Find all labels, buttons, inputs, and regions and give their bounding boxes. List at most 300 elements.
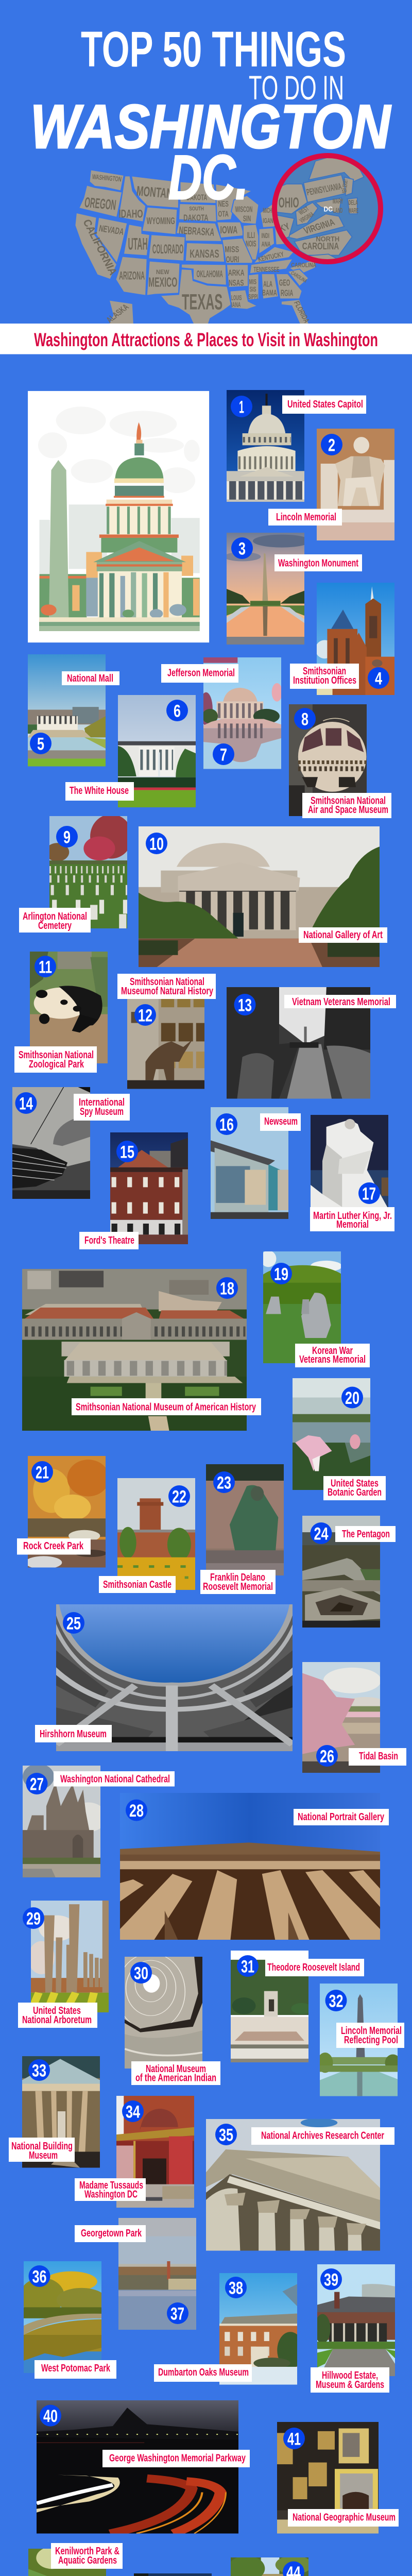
label: Washington Monument: Washington Monument [278, 557, 358, 569]
label: United States Botanic Garden [323, 1476, 386, 1500]
label: Hirshhorn Museum: Hirshhorn Museum [40, 1728, 107, 1740]
photo: United States Capitol [227, 390, 304, 502]
number badge 5: 5 [37, 735, 44, 754]
map of the United States: TEXAS [182, 290, 222, 314]
label: The Pentagon: The Pentagon [342, 1529, 390, 1540]
label: Hillwood Estate, Museum & Gardens: Museum & Gardens [316, 2379, 384, 2391]
label: National Archives Research Center [251, 2127, 394, 2145]
map inset: DC region [268, 152, 386, 267]
number badge 36: 36 [32, 2267, 46, 2286]
map inset: DC region: DELA [349, 199, 358, 206]
attraction 38 [154, 2273, 303, 2385]
map of the United States: SIS [250, 286, 256, 294]
map of the United States: COLORADO [152, 242, 183, 257]
photo: Jefferson Memorial [203, 657, 281, 769]
map of the United States: ARKA [228, 268, 244, 278]
label: National Portrait Gallery [294, 1809, 389, 1825]
label: Smithsonian National Zoological Park: Zoological Park [29, 1059, 84, 1070]
number badge 1 [231, 396, 252, 417]
label: The Pentagon [335, 1526, 396, 1542]
number badge 34: 34 [126, 2102, 140, 2122]
label: National Museum of the American Indian [131, 2061, 220, 2085]
number badge 6 [166, 700, 188, 721]
number badge 44 [283, 2562, 304, 2576]
number badge 37: 37 [170, 2304, 184, 2324]
number badge 6: 6 [174, 702, 181, 721]
number badge 12: 12 [138, 1006, 152, 1025]
map of the United States: KANSAS [190, 247, 219, 261]
label: Smithsonian Institution Offices: Institution Offices [293, 675, 356, 686]
map of the United States: ARIZONA [119, 269, 145, 282]
map inset: DC region: NEW JERSEY [341, 179, 349, 193]
label: United States Capitol [282, 396, 366, 414]
label: Jefferson Memorial [161, 664, 238, 683]
attraction 39 [311, 2264, 395, 2393]
photo: National Gallery of Art [139, 826, 380, 967]
label: Kenilworth Park & Aquatic Gardens: Aquatic Gardens [58, 2555, 117, 2566]
photo: Ford's Theatre [110, 1132, 188, 1244]
number badge 14: 14 [19, 1094, 33, 1114]
map inset: DC region: VIRGINIA [298, 210, 316, 224]
photo: Lincoln Memorial [317, 429, 394, 540]
map of the United States: OURI [226, 255, 239, 264]
label: Smithsonian National Museum of American History: Smithsonian National Museum of American History [76, 1401, 256, 1413]
map of the United States: INDI [262, 232, 269, 240]
attraction 13 [227, 987, 396, 1098]
number badge 31: 31 [241, 1957, 254, 1976]
map inset: DC region: WARE [349, 207, 358, 214]
photo: The White House [118, 695, 196, 807]
photo: Meridian Hill Park [228, 2555, 312, 2576]
map of the United States: FLORIDA [292, 300, 311, 324]
attraction 34 [75, 2096, 194, 2208]
map of the United States: RGIA [281, 289, 293, 298]
label: Kenilworth Park & Aquatic Gardens [51, 2543, 123, 2569]
photo: Vietnam Veterans Memorial [227, 987, 370, 1098]
attraction 1 [227, 390, 366, 502]
attraction 37 [75, 2218, 196, 2330]
attraction 23 [200, 1464, 284, 1594]
map of the United States: ILLI [247, 230, 255, 240]
number badge 33: 33 [32, 2061, 46, 2080]
label: George Washington Memorial Parkway: George Washington Memorial Parkway [109, 2452, 246, 2464]
photo: Newseum [211, 1107, 288, 1219]
photo: Kenilworth Park & Aquatic Gardens [28, 2547, 106, 2576]
label: National Museum of the American Indian: of the American Indian [135, 2072, 216, 2083]
attraction 33 [9, 2056, 100, 2168]
attraction 32 [317, 1984, 404, 2096]
attraction 42 [28, 2543, 123, 2576]
label: Martin Luther King, Jr. Memorial: Memorial [336, 1219, 369, 1230]
map of the United States: NEW [156, 269, 169, 276]
label: Smithsonian National Zoological Park: Smithsonian National [19, 1049, 94, 1061]
attraction 16 [211, 1107, 301, 1219]
attraction 27 [23, 1764, 175, 1877]
map of the United States: BAMA [262, 288, 277, 297]
photo: Washington Monument [227, 533, 304, 645]
photo: Theodore Roosevelt Island [231, 1951, 308, 2062]
label: Madame Tussauds Washington DC: Washington DC [84, 2189, 138, 2200]
number badge 3: 3 [238, 539, 246, 558]
label: International Spy Museum: International [79, 1097, 125, 1108]
label: Lincoln Memorial: Lincoln Memorial [276, 512, 336, 523]
label: Lincoln Memorial [268, 509, 342, 526]
map of the United States: MISS [225, 245, 239, 254]
label: Jefferson Memorial: Jefferson Memorial [167, 668, 235, 679]
number badge 25: 25 [66, 1614, 81, 1633]
label: Smithsonian Institution Offices: Smithsonian [303, 666, 346, 677]
number badge 22: 22 [172, 1487, 186, 1506]
photo: Tidal Basin [302, 1662, 380, 1773]
attraction 4 [290, 583, 394, 695]
photo: Martin Luther King, Jr. Memorial [311, 1115, 388, 1207]
attraction 5 [28, 654, 119, 767]
number badge 31 [237, 1955, 259, 1977]
label: National Museum of the American Indian: National Museum [146, 2063, 206, 2075]
map of the United States: ALASKA [104, 302, 131, 325]
title: DC. [168, 142, 248, 212]
number badge 41 [283, 2428, 305, 2449]
photo: Georgetown Park [118, 2218, 196, 2330]
photo: The Pentagon [302, 1516, 380, 1628]
number badge 38: 38 [229, 2278, 243, 2298]
label: Lincoln Memorial Reflecting Pool [336, 2023, 404, 2048]
label: Smithsonian Castle: Smithsonian Castle [103, 1579, 171, 1590]
label: National Building Museum [9, 2138, 75, 2162]
map of the United States: OREGON [83, 195, 117, 213]
photo: Rock Creek Park [28, 1456, 106, 1567]
label: Dumbarton Oaks Museum: Dumbarton Oaks Museum [158, 2367, 249, 2378]
attraction 3 [224, 533, 362, 645]
map of the United States: GEO [279, 278, 290, 288]
label: Korean War Veterans Memorial: Veterans Memorial [299, 1354, 366, 1365]
label: Smithsonian Institution Offices [290, 664, 359, 689]
label: Smithsonian National Museum of Natural History: Museumof Natural History [121, 986, 214, 997]
attraction 18 [22, 1269, 261, 1431]
number badge 30: 30 [134, 1964, 148, 1984]
attraction 7 [161, 657, 282, 769]
label: Franklin Delano Roosevelt Memorial: Franklin Delano [210, 1572, 265, 1583]
photo: West Potomac Park [24, 2261, 101, 2373]
label: Smithsonian National Zoological Park [14, 1046, 97, 1073]
label: Ford's Theatre: Ford's Theatre [84, 1235, 134, 1246]
label: National Gallery of Art: National Gallery of Art [303, 929, 383, 941]
photo: National Museum of the American Indian [125, 1957, 202, 2069]
map inset: DC region: CAROLINA [302, 241, 339, 252]
number badge 40: 40 [43, 2406, 58, 2426]
map inset: DC region: WEST [297, 205, 311, 216]
attraction 31 [231, 1951, 364, 2062]
photo: Lincoln Memorial Reflecting Pool [320, 1984, 398, 2096]
attraction 12 [117, 974, 216, 1089]
map inset: DC region: KY [278, 222, 292, 234]
attraction 36 [20, 2261, 116, 2379]
number badge 11: 11 [39, 957, 52, 977]
map of the United States: NSAS [229, 278, 244, 287]
label: West Potomac Park: West Potomac Park [41, 2363, 111, 2374]
number badge 21 [31, 1461, 53, 1483]
number badge 21: 21 [36, 1463, 49, 1483]
label: Smithsonian National Museum of Natural History: Smithsonian National [130, 976, 204, 988]
label: United States National Arboretum [18, 2003, 97, 2028]
photo: International Spy Museum [12, 1087, 90, 1199]
photo: Arlington National Cemetery [49, 816, 127, 928]
map of the United States: NOIS [246, 239, 256, 248]
map of the United States: WISCON [235, 205, 252, 214]
number badge 10: 10 [149, 835, 164, 854]
label: Newseum [260, 1113, 301, 1131]
label: National Gallery of Art [299, 927, 387, 943]
map of the United States: CAROLINA [291, 262, 316, 269]
photo: National Building Museum [22, 2056, 100, 2168]
photo: Korean War Veterans Memorial [263, 1251, 341, 1363]
label: Hillwood Estate, Museum & Gardens: Hillwood Estate, [322, 2370, 378, 2381]
photo: Hillwood Estate, Museum & Gardens [317, 2264, 395, 2376]
label: Dumbarton Oaks Museum [154, 2364, 252, 2382]
attraction 11 [14, 952, 108, 1073]
illustration: Capitol and Washington Monument [28, 391, 209, 642]
number badge 13: 13 [238, 995, 252, 1015]
attraction 19 [258, 1250, 370, 1367]
subtitle banner [0, 324, 412, 354]
map of the United States: NES [218, 199, 229, 209]
photo: United States National Arboretum [31, 1901, 109, 2012]
attraction 2 [268, 429, 394, 540]
number badge 7: 7 [220, 745, 227, 765]
photo: George Washington Memorial Parkway [37, 2400, 238, 2534]
label: Washington National Cathedral: Washington National Cathedral [60, 1773, 170, 1785]
number badge 27 [26, 1773, 47, 1794]
map of the United States: TENNESSEE [253, 266, 279, 274]
label: West Potomac Park [35, 2360, 116, 2379]
number badge 4: 4 [375, 669, 382, 688]
number badge 8 [294, 708, 316, 730]
map inset: DC region: LAND [333, 207, 342, 215]
label: The White House [65, 782, 134, 801]
number badge 15: 15 [120, 1143, 134, 1162]
number badge 35: 35 [219, 2126, 233, 2145]
label: Franklin Delano Roosevelt Memorial: Roosevelt Memorial [203, 1581, 273, 1592]
attraction 28 [120, 1793, 389, 1940]
attraction 40 [37, 2400, 250, 2534]
map of the United States: NEVADA [98, 224, 125, 238]
label: International Spy Museum: Spy Museum [80, 1106, 124, 1117]
map inset: DC region: OHIO [279, 195, 299, 211]
number badge 13 [234, 994, 255, 1015]
map of the United States: OTA [218, 209, 229, 218]
attraction 35 [206, 2118, 394, 2251]
label: Kenilworth Park & Aquatic Gardens: Kenilworth Park & [55, 2546, 119, 2557]
photo: National Archives Research Center [206, 2119, 380, 2251]
label: Franklin Delano Roosevelt Memorial [200, 1570, 276, 1594]
photo: Madame Tussauds Washington DC [116, 2096, 194, 2208]
attraction 6 [65, 695, 196, 807]
photo: Smithsonian National Air and Space Museum [289, 704, 367, 816]
label: Korean War Veterans Memorial: Korean War [312, 1345, 353, 1357]
map of the United States [75, 170, 317, 327]
attraction 20 [293, 1378, 386, 1500]
label: Georgetown Park [75, 2225, 146, 2242]
label: The White House: The White House [70, 785, 129, 796]
map inset: DC region: VIRGINIA [302, 217, 336, 236]
label: Tidal Basin [349, 1748, 406, 1766]
number badge 32: 32 [329, 1992, 343, 2011]
photo: Smithsonian National Zoological Park [30, 952, 108, 1063]
label: Newseum: Newseum [264, 1116, 298, 1127]
label: United States Botanic Garden: United States [331, 1478, 379, 1489]
map of the United States: UTAH [128, 235, 148, 253]
attraction 14 [12, 1087, 130, 1199]
photo: Smithsonian Castle [117, 1478, 195, 1590]
number badge 29: 29 [26, 1909, 41, 1929]
label: Arlington National Cemetery [19, 908, 91, 933]
number badge 20: 20 [345, 1388, 359, 1408]
number badge 14 [15, 1092, 37, 1114]
photo: Smithsonian National Museum of Natural History [127, 999, 204, 1089]
number badge 23: 23 [217, 1473, 231, 1493]
photo: National Mall [28, 654, 106, 767]
attraction 8 [289, 704, 391, 818]
label: United States Botanic Garden: Botanic Garden [328, 1487, 382, 1498]
label: National Building Museum: National Building [11, 2141, 73, 2152]
map of the United States: SOUTH [189, 206, 204, 212]
map inset: DC region: MARY [333, 198, 344, 206]
label: National Mall: National Mall [67, 673, 113, 684]
attraction 21 [17, 1456, 109, 1569]
map inset: DC region: PENNSYLVANIA [305, 181, 342, 198]
map of the United States: WASHINGTON [92, 173, 122, 183]
map inset: DC region: NORTH [316, 236, 339, 243]
number badge 16: 16 [219, 1115, 234, 1134]
attraction 41 [277, 2422, 399, 2534]
label: George Washington Memorial Parkway [102, 2450, 250, 2467]
number badge 24: 24 [314, 1524, 329, 1544]
number badge 5 [30, 733, 52, 754]
label: United States National Arboretum: United States [33, 2005, 81, 2016]
photo: National Geographic Museum [277, 2422, 379, 2534]
number badge 19: 19 [274, 1264, 288, 1284]
map of the United States: DAKOTA [183, 213, 209, 223]
map of the United States: ALA [263, 279, 272, 289]
title [30, 21, 391, 212]
label: National Building Museum: Museum [29, 2150, 58, 2161]
number badge 1: 1 [239, 398, 244, 417]
attraction 44 [220, 2555, 312, 2576]
photo: United States Botanic Garden [293, 1378, 370, 1490]
map of the United States: NEBRASKA [179, 224, 215, 238]
map of the United States: WYOMING [147, 216, 175, 227]
label: Theodore Roosevelt Island: Theodore Roosevelt Island [267, 1962, 360, 1973]
number badge 2: 2 [328, 436, 335, 455]
attraction 43 [104, 2573, 212, 2576]
label: Madame Tussauds Washington DC: Madame Tussauds [79, 2180, 143, 2191]
label: Theodore Roosevelt Island [265, 1959, 364, 1976]
number badge 3 [231, 537, 253, 559]
map of the United States: LOUIS [231, 294, 242, 302]
label: Smithsonian National Air and Space Museum [302, 793, 391, 818]
photo: Smithsonian National Museum of American History [22, 1269, 247, 1431]
label: Smithsonian National Museum of Natural History [117, 974, 216, 999]
map inset: DC region: DC [324, 206, 333, 213]
label: Washington Monument [274, 554, 362, 571]
map of the United States: CALIFORNIA [80, 218, 119, 277]
map of the United States: IANA [231, 301, 241, 309]
map of the United States: MICH [263, 207, 272, 215]
map of the United States: IDAHO [119, 208, 143, 221]
label: Washington National Cathedral [54, 1771, 175, 1787]
photo: Arthur M. Sackler Gallery [134, 2573, 212, 2576]
map of the United States: MIS [249, 278, 256, 286]
label: International Spy Museum [74, 1094, 130, 1121]
photo: Dumbarton Oaks Museum [219, 2273, 297, 2385]
number badge 18: 18 [220, 1279, 234, 1298]
label: Madame Tussauds Washington DC [75, 2178, 146, 2201]
attraction 17 [310, 1115, 394, 1231]
number badge 8: 8 [301, 710, 308, 730]
label: United States National Arboretum: National Arboretum [22, 2014, 92, 2026]
number badge 28: 28 [129, 1801, 144, 1821]
photo: Franklin Delano Roosevelt Memorial [206, 1464, 284, 1575]
photo: Washington National Cathedral [23, 1766, 100, 1877]
label: Rock Creek Park: Rock Creek Park [23, 1540, 84, 1552]
attraction 25 [35, 1604, 296, 1751]
label: Ford's Theatre [79, 1232, 139, 1249]
label: Georgetown Park: Georgetown Park [81, 2228, 142, 2239]
label: Arlington National Cemetery: Arlington National [23, 911, 87, 922]
attraction 22 [99, 1478, 195, 1593]
photo: National Portrait Gallery [120, 1793, 380, 1940]
number badge 17: 17 [362, 1184, 376, 1204]
photo: Smithsonian Institution Offices [317, 583, 394, 695]
attraction 10 [139, 826, 387, 967]
number badge 2 [321, 434, 342, 455]
label: Arlington National Cemetery: Cemetery [38, 920, 72, 931]
number badge 4 [368, 667, 389, 689]
label: Rock Creek Park [17, 1538, 91, 1555]
number badge 7 [213, 743, 234, 765]
map of the United States: KENTUCKY [257, 250, 285, 264]
number badge 39: 39 [324, 2270, 338, 2290]
label: Korean War Veterans Memorial [295, 1344, 370, 1367]
attraction 9 [19, 814, 132, 933]
attraction 29 [18, 1901, 109, 2028]
number badge 9: 9 [63, 827, 71, 847]
map of the United States: CAROLINA [289, 270, 308, 284]
label: National Geographic Museum [288, 2509, 399, 2527]
label: National Mall [62, 671, 119, 685]
number badge 27: 27 [30, 1774, 44, 1794]
label: Martin Luther King, Jr. Memorial [310, 1207, 394, 1231]
label: Smithsonian Castle [99, 1576, 176, 1593]
map of the United States: ANA [262, 240, 271, 248]
attraction 15 [79, 1132, 188, 1249]
map of the United States: IGAN [263, 217, 273, 225]
label: United States Capitol: United States Capitol [287, 399, 363, 410]
number badge 41: 41 [287, 2430, 301, 2449]
label: Hirshhorn Museum [35, 1725, 112, 1742]
photo: Hirshhorn Museum [56, 1604, 293, 1751]
map of the United States: OKLAHOMA [197, 269, 223, 280]
attraction 24 [302, 1516, 396, 1628]
title: TO DO IN [249, 69, 344, 107]
map of the United States: IOWA [220, 224, 237, 236]
label: Hillwood Estate, Museum & Gardens [311, 2367, 389, 2393]
map of the United States: MEXICO [148, 275, 177, 290]
number badge 9 [56, 826, 78, 848]
label: Smithsonian National Museum of American History [72, 1398, 261, 1415]
map of the United States: SIN [243, 214, 251, 223]
number badge 26: 26 [320, 1747, 334, 1766]
